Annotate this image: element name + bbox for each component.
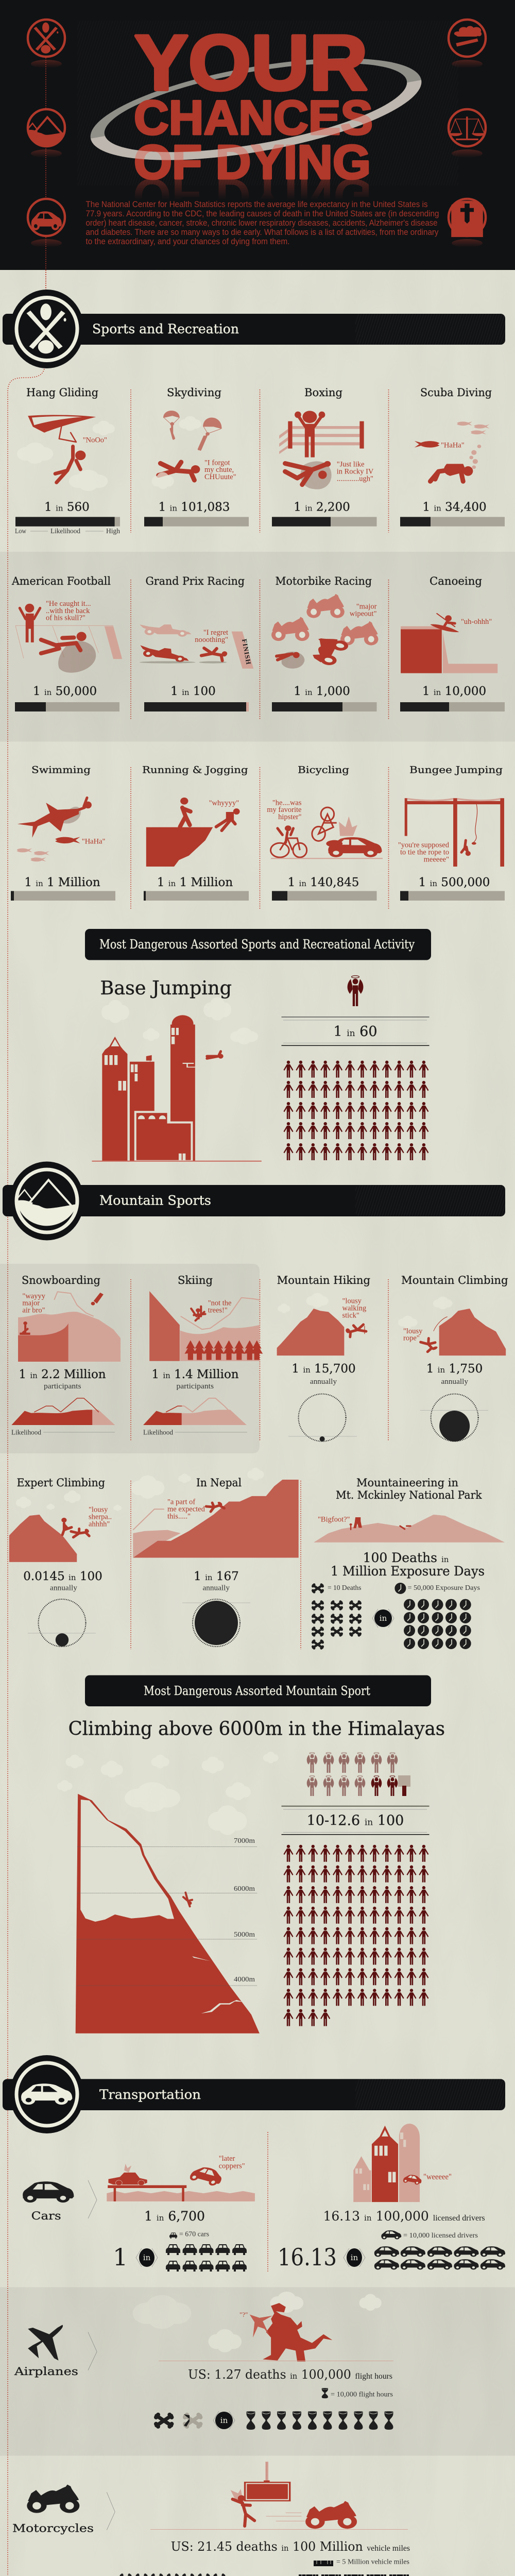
panel: base jumping: Base Jumping [100, 978, 232, 999]
panel: mountain hiking: 1 in 15,700 [291, 1362, 356, 1376]
altitude markers [77, 1837, 257, 1986]
legend: = 50,000 Exposure Days [408, 1584, 480, 1592]
probability circle [288, 1394, 357, 1442]
quote: "not the [208, 1299, 231, 1308]
panel: boxing [272, 386, 377, 527]
quote: "later [219, 2155, 235, 2163]
divider [281, 1805, 430, 1807]
chevron [88, 2180, 97, 2218]
panel: skydiving [144, 386, 249, 527]
panel: canoeing: Canoeing [430, 575, 482, 587]
panel: bicycling [267, 765, 383, 901]
section header: Transportation: Transportation [99, 2087, 201, 2102]
likelihood bar [15, 517, 120, 527]
banner: most dangerous sport: Most Dangerous Assorted Sports and Recreational Activity [99, 937, 415, 952]
panel: base jumping [92, 976, 430, 1161]
quote [46, 600, 91, 622]
altitude markers: 5000m [234, 1931, 255, 1939]
quote [89, 1505, 112, 1528]
panel: skiing: participants [176, 1382, 214, 1391]
icon: car [23, 2181, 74, 2202]
panel: cars: Cars [31, 2210, 61, 2222]
panel: cars: 16.13 in 100,000 licensed drivers [323, 2209, 485, 2224]
likelihood bar [144, 891, 249, 901]
panel: scuba diving [400, 386, 505, 527]
likelihood scale: High [106, 528, 120, 535]
panel: motorbike racing [271, 575, 378, 711]
person grid: 60 people [283, 1061, 428, 1160]
illustration: runner and cliff [146, 798, 240, 867]
clouds [278, 1293, 329, 1313]
illustration: slope [133, 1480, 299, 1557]
illustration: motorbikes [271, 594, 378, 669]
panel: mountain climbing: Mountain Climbing [401, 1274, 508, 1286]
illustration: race crash [137, 624, 253, 669]
legend: = 10,000 licensed drivers [403, 2232, 478, 2240]
panel: canoeing: 1 in 10,000 [422, 685, 486, 698]
illustration: shark [16, 798, 92, 861]
panel: running and jogging: Running & Jogging [142, 765, 248, 776]
panel: bungee jumping: Bungee Jumping [409, 765, 503, 776]
panel: running and jogging: "whyyyy" [209, 799, 239, 807]
panel: cars: 1 in 6,700 [144, 2209, 205, 2224]
title: OF DYING [134, 135, 371, 189]
quote: "you're supposed [398, 841, 450, 850]
panel: snowboarding [11, 1274, 121, 1437]
intro paragraph: 77.9 years. According to the CDC, the leading causes of death in the United States are (in descending [85, 209, 439, 218]
likelihood scale [15, 528, 120, 535]
legend [312, 1583, 480, 1594]
front car grid [166, 2244, 247, 2272]
cloud [152, 416, 201, 489]
row separators [131, 389, 388, 909]
panel: grand prix racing: FINISH [241, 638, 253, 666]
panel: boxing: Boxing [304, 386, 342, 399]
in badge: in [351, 2253, 358, 2262]
quote: "wayyy [22, 1292, 46, 1300]
quote: this....." [167, 1513, 191, 1521]
panel: cars: 16.13 [278, 2243, 337, 2271]
panel: running and jogging: 1 in 1 Million [157, 876, 233, 889]
bones icons [154, 2413, 202, 2429]
likelihood bar [144, 517, 249, 527]
title: YOUR [134, 19, 368, 107]
quote [219, 2155, 245, 2170]
clouds [131, 1468, 264, 1499]
panel: canoeing: "uh-ohhh" [461, 618, 492, 626]
panel: hang gliding: 1 in 560 [44, 501, 90, 514]
panel: bungee jumping [398, 765, 505, 901]
panel: skiing [143, 1274, 263, 1437]
panel: mt mckinley: Mountaineering in [356, 1477, 458, 1489]
panel: swimming: Swimming [31, 765, 91, 776]
separators [131, 1279, 388, 1650]
quote [208, 1299, 231, 1315]
illustration: falling from glider [28, 415, 96, 482]
illustration: football field [15, 604, 122, 673]
quote: "lousy [403, 1327, 423, 1335]
quote: "Just like [337, 461, 365, 469]
clock grid [404, 1599, 471, 1649]
panel: mountain climbing: annually [441, 1378, 469, 1386]
illustration: diver and fish [415, 421, 489, 481]
bones grid [312, 1600, 362, 1650]
quote: hipster" [278, 813, 302, 821]
illustration: bridge [405, 798, 504, 867]
illustration: mountain [418, 1309, 506, 1355]
panel: swimming: 1 in 1 Million [24, 876, 100, 889]
quote [22, 1292, 46, 1315]
in badge [136, 2248, 158, 2267]
panel: snowboarding: participants [44, 1382, 81, 1391]
legend: = 10 Deaths [328, 1584, 362, 1592]
quote: me expected [167, 1505, 205, 1514]
panel: skiing: 1 in 1.4 Million [151, 1368, 239, 1381]
quote [204, 459, 236, 481]
panel: skiing: Skiing [178, 1274, 213, 1286]
section header: Mountain Sports: Mountain Sports [99, 1193, 211, 1208]
in badge: in [380, 1614, 387, 1623]
legend [381, 2230, 478, 2240]
panel: expert climbing: Expert Climbing [16, 1477, 105, 1489]
quote: nooothing" [195, 636, 228, 644]
quote: coppers" [219, 2162, 245, 2170]
quote: rope" [403, 1334, 420, 1343]
road tile grid [299, 2574, 409, 2576]
panel: running and jogging [142, 765, 249, 901]
panel: cars: 1 [113, 2243, 128, 2271]
altitude markers: 4000m [234, 1976, 255, 1984]
likelihood mountain [143, 1398, 247, 1425]
buildings and falling car [353, 2124, 420, 2202]
panel: grand prix racing [137, 575, 253, 711]
likelihood scale: Likelihood [11, 1429, 41, 1437]
intro paragraph: order) heart disease, cancer, stroke, chronic lower respiratory diseases, accidents, Alzheimer's disease [85, 218, 438, 228]
likelihood scale: Likelihood [50, 528, 80, 535]
panel: motorbike racing: Motorbike Racing [275, 575, 372, 587]
likelihood scale: Low [15, 528, 27, 535]
illustration: boxing ring [279, 411, 364, 489]
panel: hang gliding: Hang Gliding [26, 386, 98, 399]
illustration: mountain and bigfoot [314, 1515, 505, 1543]
clouds [398, 1297, 453, 1328]
in badge: in [143, 2253, 151, 2262]
in badge [372, 1609, 394, 1628]
likelihood bar [15, 702, 119, 711]
bones grid [119, 2573, 226, 2576]
in badge [344, 2248, 365, 2267]
likelihood bar [272, 891, 377, 901]
clouds [16, 1490, 122, 1511]
panel: motorbike racing: 1 in 1,000 [294, 685, 350, 698]
illustration: bikes and car [271, 807, 383, 858]
panel: expert climbing: 0.0145 in 100 [23, 1570, 102, 1583]
panel: in nepal: annually [203, 1584, 230, 1592]
in badge [213, 2411, 235, 2430]
illustration: mountain [76, 1794, 260, 2033]
clouds [57, 1752, 279, 1835]
illustration: mountain [9, 1515, 92, 1562]
panel: airplanes: US: 1.27 deaths in 100,000 flight hours [188, 2367, 392, 2382]
quote: ............ugh" [337, 475, 373, 483]
illustration: waterfall [401, 614, 497, 673]
in badge: in [220, 2416, 228, 2425]
altitude markers: 7000m [234, 1837, 255, 1845]
main dotted route [8, 270, 64, 2576]
header panel [0, 0, 515, 290]
clouds [17, 421, 115, 491]
panel: expert climbing: annually [50, 1584, 78, 1592]
title ring front [91, 80, 421, 160]
panel: grand prix racing: 1 in 100 [170, 685, 216, 698]
quote: air bro" [22, 1307, 45, 1315]
panel: hang gliding [15, 386, 120, 535]
probability circle [420, 1394, 488, 1442]
section header: Transportation [3, 2055, 505, 2133]
legend: = 10,000 flight hours [331, 2391, 393, 2399]
panel: scuba diving: "HaHa" [441, 442, 465, 450]
altitude markers: 6000m [234, 1885, 255, 1893]
panel: scuba diving: Scuba Diving [420, 386, 492, 399]
panel: american football [11, 575, 122, 711]
clouds [101, 997, 258, 1044]
panel: mt mckinley: 100 Deaths in [363, 1550, 449, 1565]
panel: swimming [11, 765, 115, 901]
panel: mt mckinley: Mt. Mckinley National Park [336, 1489, 482, 1501]
quote: major [22, 1299, 40, 1308]
panel: american football: American Football [11, 575, 111, 587]
quote: walking [342, 1304, 366, 1312]
panel: expert climbing [9, 1477, 122, 1647]
section header: Mountain Sports [3, 1161, 505, 1241]
quote [342, 1297, 366, 1319]
panel: skydiving: 1 in 101,083 [159, 501, 230, 514]
panel: snowboarding: 1 in 2.2 Million [19, 1368, 106, 1381]
likelihood bar [400, 702, 505, 711]
intro paragraph [85, 200, 439, 246]
panel: airplanes [14, 2292, 393, 2430]
panel: himalayas: 10-12.6 in 100 [307, 1813, 404, 1829]
likelihood bar [400, 517, 505, 527]
panel: in nepal [131, 1468, 299, 1647]
likelihood bar [400, 891, 505, 901]
divider [283, 1043, 427, 1044]
divider [281, 1016, 430, 1018]
panel: snowboarding: Snowboarding [22, 1274, 100, 1286]
hourglass row [246, 2411, 393, 2430]
divider [283, 1832, 427, 1833]
panel: boxing: 1 in 2,200 [294, 501, 350, 514]
illustration: cars driving off pier [107, 2124, 423, 2202]
quote [167, 1498, 205, 1521]
quote: "lousy [342, 1297, 362, 1305]
illustration: monster and plane [28, 2303, 393, 2370]
legend: = 670 cars [179, 2231, 209, 2239]
title: OF DYING [133, 168, 372, 223]
panel: mountain hiking: Mountain Hiking [277, 1274, 370, 1286]
header icon connector [45, 58, 46, 290]
illustration: half pipe [18, 1292, 121, 1362]
intro paragraph: The National Center for Health Statistics reports the average life expectancy in the United States is [85, 200, 427, 209]
panel: bicycling: Bicycling [298, 765, 349, 776]
header icons [28, 20, 486, 247]
panel: motorcycles: US: 21.45 deaths in 100 Million vehicle miles [171, 2539, 410, 2554]
quote: "major [356, 603, 377, 611]
panel: mt mckinley [312, 1477, 505, 1650]
quote: "I regret [203, 629, 228, 637]
panel: grand prix racing: Grand Prix Racing [145, 575, 245, 587]
title ring behind [83, 39, 428, 180]
quote: trees!" [208, 1307, 228, 1315]
panel: in nepal: In Nepal [196, 1477, 242, 1489]
panel: canoeing [400, 575, 505, 711]
likelihood bar [11, 891, 115, 901]
band: snow sports [0, 1264, 260, 1453]
section header: Sports and Recreation [3, 290, 505, 368]
legend [322, 2388, 393, 2399]
probability circle [28, 1599, 96, 1647]
panel: hang gliding: "NoOo" [83, 436, 107, 444]
title: CHANCES [134, 91, 373, 144]
panel: himalayas: Climbing above 6000m in the Himalayas [68, 1718, 445, 1739]
quote: in Rocky IV [337, 468, 374, 476]
panel: mt mckinley: 1 Million Exposure Days [331, 1564, 485, 1579]
illustration: buildings [92, 1015, 261, 1161]
quote: of his skull?" [46, 614, 85, 622]
clouds [133, 2292, 382, 2352]
quote: wipeout" [350, 610, 377, 618]
side car grid [374, 2246, 505, 2269]
panel: swimming: "HaHa" [82, 838, 106, 846]
panel: skydiving: Skydiving [167, 386, 221, 399]
quote: "lousy [89, 1505, 108, 1514]
intro paragraph: and diabetes. There are so many ways to die early. What follows is a list of activities, from the ordinary [85, 228, 439, 237]
panel: mountain hiking: annually [310, 1378, 337, 1386]
quote: "I forgot [204, 459, 230, 467]
darker band [0, 552, 515, 742]
panel: mountain climbing [398, 1274, 508, 1442]
quote: sherpa.. [89, 1513, 112, 1521]
illustration: parachutists [159, 411, 222, 480]
quote: "he....was [272, 799, 302, 807]
quote [403, 1327, 423, 1343]
quote: ..with the back [46, 607, 90, 615]
quote [267, 799, 302, 821]
likelihood bar [272, 517, 377, 527]
quote: "a part of [167, 1498, 195, 1506]
illustration: motorcycle and falling sign [27, 2462, 408, 2530]
panel: cars [23, 2124, 505, 2272]
quote [195, 629, 228, 644]
quote [337, 461, 374, 483]
quote: my favorite [267, 806, 302, 814]
panel: airplanes: Airplanes [14, 2365, 78, 2378]
band: airplanes [0, 2287, 515, 2455]
likelihood scale: Likelihood [143, 1429, 173, 1437]
panel: himalayas [57, 1718, 445, 2033]
quote: to tie the rope to [400, 849, 449, 857]
likelihood bar [272, 702, 377, 711]
banner: most dangerous mountain sport: Most Dangerous Assorted Mountain Sport [144, 1684, 370, 1698]
panel: motorcycles [12, 2462, 410, 2576]
panel: mountain climbing: 1 in 1,750 [426, 1362, 483, 1376]
quote: stick" [342, 1311, 359, 1319]
panel: mountain hiking [277, 1274, 370, 1442]
quote: "He caught it... [46, 600, 91, 608]
person grid: 100 people [283, 1845, 428, 2026]
illustration: skier and trees [149, 1291, 263, 1361]
title [133, 19, 373, 223]
illustration: mountain [277, 1309, 367, 1355]
angel icon [348, 976, 363, 1006]
panel: bicycling: 1 in 140,845 [288, 876, 359, 889]
intro paragraph: to the extraordinary, and your chances of dying from them. [85, 237, 289, 246]
panel: scuba diving: 1 in 34,400 [422, 501, 487, 514]
panel: bungee jumping: 1 in 500,000 [419, 876, 490, 889]
quote: ahhhh" [89, 1520, 110, 1528]
likelihood bar [144, 702, 249, 711]
panel: mt mckinley: "Bigfoot?" [318, 1516, 350, 1524]
section header: Sports and Recreation: Sports and Recreation [92, 321, 239, 336]
banner: most dangerous mountain sport [85, 1675, 431, 1706]
panel: in nepal: 1 in 167 [194, 1570, 239, 1583]
angel icons [307, 1753, 410, 1796]
quote: my chute, [204, 466, 234, 474]
banner: most dangerous sport [85, 929, 431, 960]
legend: = 5 Million vehicle miles [336, 2558, 409, 2566]
probability circle [182, 1599, 250, 1647]
quote: CHUuute" [204, 473, 236, 481]
panel: cars: "weeeee" [423, 2173, 452, 2181]
panel: base jumping: 1 in 60 [333, 1024, 377, 1040]
quote [350, 603, 377, 618]
likelihood mountain [11, 1398, 115, 1425]
panel: american football: 1 in 50,000 [33, 685, 97, 698]
panel: motorcycles: Motorcycles [12, 2522, 94, 2535]
panel: airplanes: "?" [239, 2311, 248, 2318]
quote: meeeee" [424, 856, 449, 864]
quote [398, 841, 450, 864]
